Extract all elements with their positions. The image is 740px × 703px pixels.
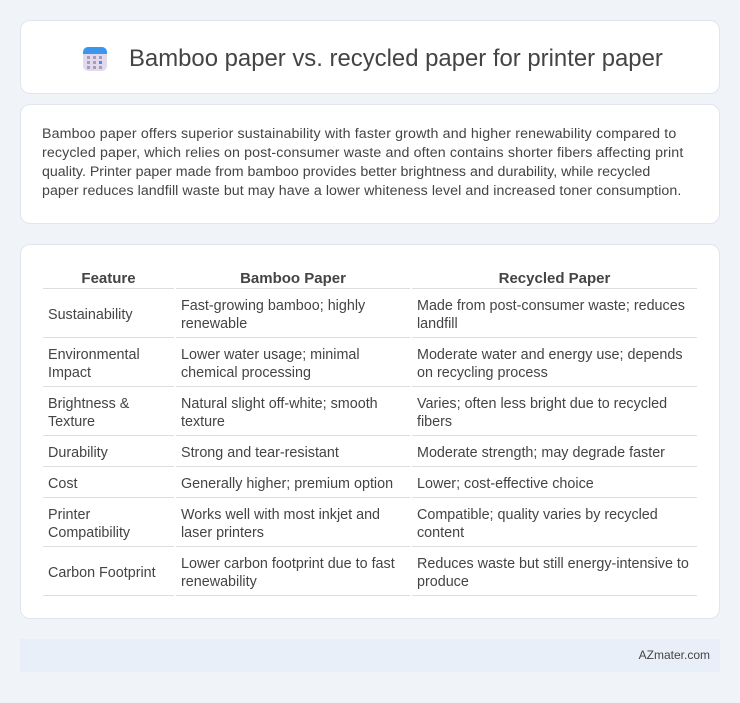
footer bar [20, 639, 720, 672]
row: carbon footprint: Lower carbon footprint due to fast [181, 556, 395, 572]
summary text: recycled paper, which relies on post-consumer waste and often contains shorter fibers affecting print [42, 145, 683, 161]
row: environmental impact [43, 347, 697, 387]
row: cost: Generally higher; premium option [181, 476, 393, 492]
table header: Recycled Paper [499, 270, 610, 287]
row: durability: Moderate strength; may degrade faster [417, 445, 665, 461]
summary text: paper reduces landfill waste but may have a lower whiteness level and increased toner consumption. [42, 183, 681, 199]
row: printer compatibility: content [417, 525, 464, 541]
row: durability: Durability [48, 445, 108, 461]
row: brightness and texture [43, 396, 697, 436]
row: carbon footprint: renewability [181, 574, 257, 590]
row: environmental impact: Lower water usage; minimal [181, 347, 360, 363]
row: cost [43, 476, 697, 498]
table header [43, 270, 697, 289]
row: printer compatibility: Compatibility [48, 525, 130, 541]
row: sustainability: landfill [417, 316, 458, 332]
row: cost: Lower; cost-effective choice [417, 476, 594, 492]
panel: title card [20, 20, 720, 94]
row: brightness and texture: fibers [417, 414, 452, 430]
row: environmental impact: Moderate water and energy use; depends [417, 347, 683, 363]
row: printer compatibility [43, 507, 697, 547]
title: Bamboo paper vs. recycled paper for printer paper [129, 45, 663, 72]
panel: summary [20, 104, 720, 224]
row: carbon footprint: Carbon Footprint [48, 565, 156, 581]
row: brightness and texture: Brightness & [48, 396, 129, 412]
row: brightness and texture: Natural slight off-white; smooth [181, 396, 378, 412]
row: sustainability: Sustainability [48, 307, 133, 323]
panel: comparison table [20, 244, 720, 619]
row: brightness and texture: texture [181, 414, 225, 430]
row: durability [43, 445, 697, 467]
row: carbon footprint: Reduces waste but still energy-intensive to [417, 556, 689, 572]
row: printer compatibility: Compatible; quality varies by recycled [417, 507, 658, 523]
row: environmental impact: on recycling process [417, 365, 548, 381]
row: sustainability: Made from post-consumer waste; reduces [417, 298, 685, 314]
row: sustainability: renewable [181, 316, 247, 332]
row: cost: Cost [48, 476, 78, 492]
row: environmental impact: Environmental [48, 347, 140, 363]
row: environmental impact: Impact [48, 365, 91, 381]
row: durability: Strong and tear-resistant [181, 445, 339, 461]
row: sustainability: Fast-growing bamboo; highly [181, 298, 365, 314]
summary text: Bamboo paper offers superior sustainability with faster growth and higher renewability compared to [42, 126, 676, 142]
row: printer compatibility: Printer [48, 507, 90, 523]
table header: Feature [81, 270, 136, 287]
summary text: quality. Printer paper made from bamboo provides better brightness and durability, while recycled [42, 164, 650, 180]
footer credit: AZmater.com [639, 648, 710, 662]
table header: Bamboo Paper [240, 270, 346, 287]
summary text [42, 126, 684, 199]
row: sustainability [43, 298, 697, 338]
row: printer compatibility: Works well with most inkjet and [181, 507, 380, 523]
row: brightness and texture: Texture [48, 414, 95, 430]
row: printer compatibility: laser printers [181, 525, 264, 541]
icon: calendar [83, 47, 107, 71]
row: carbon footprint [43, 556, 697, 596]
row: brightness and texture: Varies; often less bright due to recycled [417, 396, 667, 412]
row: carbon footprint: produce [417, 574, 469, 590]
row: environmental impact: chemical processing [181, 365, 311, 381]
